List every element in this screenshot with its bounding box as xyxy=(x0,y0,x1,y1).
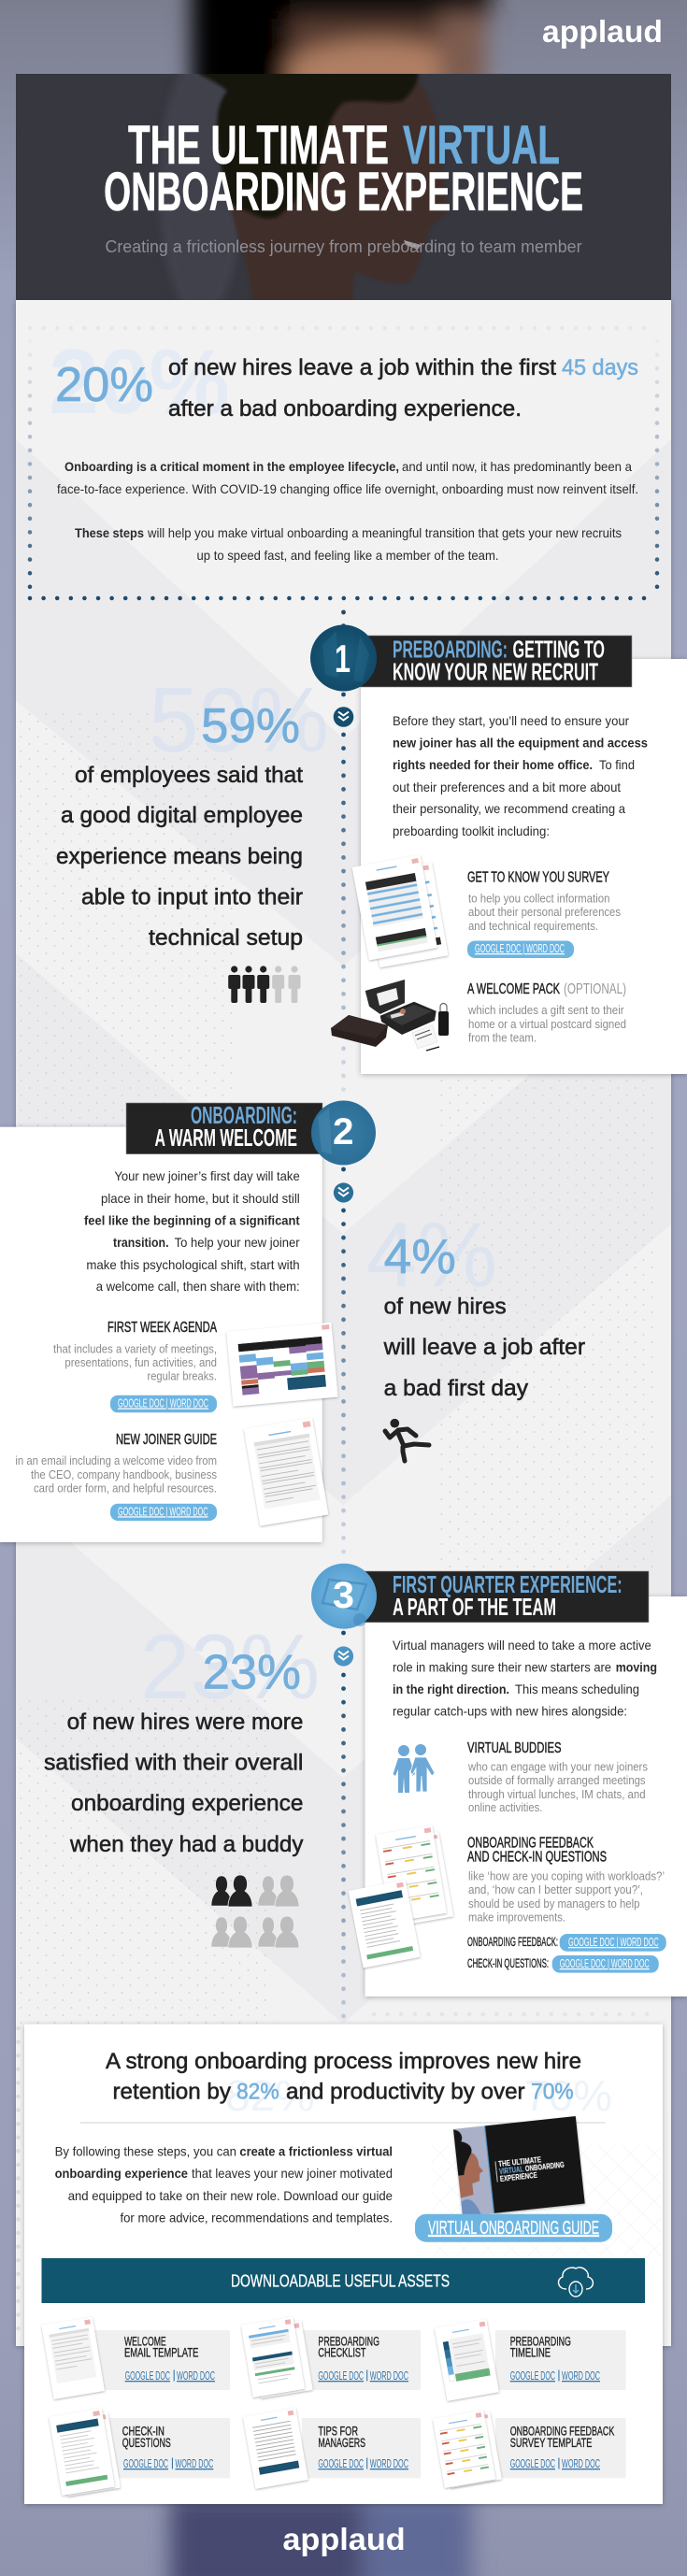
preboarding text: preboarding toolkit including: xyxy=(393,823,550,838)
conclusion text: and equipped to take on their new role. Download our guide xyxy=(68,2188,393,2203)
asset: tips for managers: GOOGLE DOC xyxy=(318,2456,364,2470)
onboarding text: place in their home, but it should still xyxy=(101,1191,300,1206)
conclusion heading: A strong onboarding process improves new hire xyxy=(106,2049,581,2074)
step 2 circle: 2 xyxy=(333,1111,353,1152)
intro stat: after a bad onboarding experience. xyxy=(168,396,522,422)
asset: tips for managers: WORD DOC xyxy=(370,2456,408,2470)
stat: 4% xyxy=(366,1204,585,1401)
asset: check-in questions: WORD DOC xyxy=(176,2456,213,2470)
main panel xyxy=(16,300,671,2346)
feedback item: ONBOARDING FEEDBACK xyxy=(467,1836,594,1852)
feedback item: CHECK-IN QUESTIONS: xyxy=(467,1956,549,1970)
conclusion text: create a frictionless virtual xyxy=(239,2144,393,2159)
stat: 23%: of new hires were more xyxy=(67,1710,303,1735)
step 1 heading bar: PREBOARDING: xyxy=(393,636,508,664)
stat: 23%: 23% xyxy=(140,1615,320,1718)
survey item: to help you collect information xyxy=(468,893,610,906)
panel: conclusion card xyxy=(24,2025,663,2504)
first quarter text: role in making sure their new starters are xyxy=(393,1660,611,1675)
virtual buddies item: through virtual lunches, IM chats, and xyxy=(468,1788,646,1801)
asset: check-in questions: | xyxy=(171,2455,174,2469)
asset: tips for managers: | xyxy=(365,2455,368,2469)
conclusion heading xyxy=(106,2049,612,2120)
asset: preboarding checklist: PREBOARDING xyxy=(318,2334,379,2348)
step 3 heading bar: A PART OF THE TEAM xyxy=(393,1593,556,1621)
onboarding text: feel like the beginning of a significant xyxy=(84,1213,300,1228)
stat: 4%: of new hires xyxy=(384,1295,507,1320)
survey item: GOOGLE DOC | WORD DOC xyxy=(475,942,565,955)
preboarding text: new joiner has all the equipment and access xyxy=(393,735,648,750)
agenda item: regular breaks. xyxy=(148,1370,217,1383)
asset: preboarding checklist: | xyxy=(365,2368,368,2382)
asset: onboarding feedback survey template: WORD DOC xyxy=(562,2456,600,2470)
asset: tips for managers: MANAGERS xyxy=(318,2436,365,2450)
survey item xyxy=(467,870,621,958)
chevron marker 1 xyxy=(334,707,353,727)
onboarding text: To help your new joiner xyxy=(175,1235,300,1250)
welcome pack item: A WELCOME PACK xyxy=(467,981,560,997)
step 1 circle xyxy=(310,624,377,692)
stat: 59%: 59% xyxy=(201,699,300,753)
asset: check-in questions: GOOGLE DOC xyxy=(123,2456,168,2470)
asset: tips for managers: TIPS FOR xyxy=(318,2425,358,2439)
agenda item: presentations, fun activities, and xyxy=(64,1356,217,1369)
survey item: GET TO KNOW YOU SURVEY xyxy=(467,870,609,886)
guide item: the CEO, company handbook, business xyxy=(31,1468,217,1481)
welcome pack item: from the team. xyxy=(468,1032,537,1045)
stat: 4%: 4% xyxy=(366,1204,497,1307)
stat: 59%: a good digital employee xyxy=(61,803,303,828)
feedback item: should be used by managers to help xyxy=(468,1897,640,1911)
asset: welcome email template: GOOGLE DOC xyxy=(125,2368,170,2383)
first quarter text xyxy=(393,1638,657,1719)
asset: preboarding checklist: CHECKLIST xyxy=(318,2346,366,2360)
conclusion text: for more advice, recommendations and templates. xyxy=(120,2211,393,2225)
document: joiner guide xyxy=(244,1418,328,1526)
feedback item: AND CHECK-IN QUESTIONS xyxy=(467,1850,607,1866)
step 1 circle: 1 xyxy=(335,637,351,680)
icon: runner xyxy=(385,1419,429,1461)
step 3 heading bar xyxy=(360,1570,649,1623)
welcome pack item: (OPTIONAL) xyxy=(564,981,626,997)
welcome pack item: which includes a gift sent to their xyxy=(467,1004,624,1017)
asset: preboarding checklist: WORD DOC xyxy=(370,2368,408,2383)
subtitle: Creating a frictionless journey from preboarding to team member xyxy=(105,237,582,256)
guide cover: VIRTUAL xyxy=(499,2164,523,2176)
asset: tips for managers xyxy=(243,2408,421,2489)
guide cover: THE ULTIMATE xyxy=(498,2154,542,2168)
asset: preboarding checklist: GOOGLE DOC xyxy=(318,2368,364,2383)
virtual buddies item: outside of formally arranged meetings xyxy=(468,1774,646,1787)
asset: preboarding checklist xyxy=(241,2317,421,2398)
onboarding text: Your new joiner’s first day will take xyxy=(114,1168,300,1183)
feedback item: and, ‘how can I better support you?’, xyxy=(468,1883,643,1896)
agenda item: FIRST WEEK AGENDA xyxy=(107,1320,217,1336)
guide item: in an email including a welcome video from xyxy=(15,1454,217,1467)
agenda item: that includes a variety of meetings, xyxy=(53,1343,217,1356)
step 1 heading bar: GETTING TO xyxy=(512,636,605,664)
guide item: NEW JOINER GUIDE xyxy=(116,1432,217,1448)
virtual buddies item: online activities. xyxy=(468,1801,542,1814)
center timeline dots xyxy=(341,612,346,2020)
onboarding text xyxy=(84,1168,300,1294)
asset: preboarding timeline: PREBOARDING xyxy=(510,2334,571,2348)
asset: welcome email template: WELCOME xyxy=(124,2334,166,2348)
stat: 23%: 23% xyxy=(203,1646,301,1700)
icon: buddy pairs xyxy=(211,1875,299,1948)
asset: preboarding timeline xyxy=(435,2319,626,2401)
guide item xyxy=(15,1432,217,1521)
conclusion text: that leaves your new joiner motivated xyxy=(192,2166,393,2181)
assets banner xyxy=(41,2258,645,2303)
panel: first quarter card xyxy=(365,1596,687,1996)
stat: 4%: will leave a job after xyxy=(383,1335,585,1360)
asset: welcome email template xyxy=(41,2317,230,2399)
stat: 23%: onboarding experience xyxy=(71,1791,303,1816)
feedback item: make improvements. xyxy=(468,1911,565,1925)
image: welcome pack xyxy=(331,980,449,1051)
asset: preboarding timeline: | xyxy=(557,2368,561,2382)
asset: check-in questions: QUESTIONS xyxy=(122,2436,171,2450)
asset: onboarding feedback survey template: ONBOARDING FEEDBACK xyxy=(510,2425,614,2439)
preboarding text: rights needed for their home office. xyxy=(393,757,593,772)
asset: welcome email template: WORD DOC xyxy=(177,2368,215,2383)
applaud logo bottom: applaud xyxy=(282,2522,406,2556)
icon: people 3 of 5 xyxy=(228,966,301,1003)
intro stat: of new hires leave a job within the first xyxy=(168,355,556,380)
step 3 circle: 3 xyxy=(333,1575,354,1616)
step 3 circle xyxy=(311,1564,377,1629)
guide item: GOOGLE DOC | WORD DOC xyxy=(118,1505,208,1518)
intro stat: 45 days xyxy=(562,355,638,380)
stat: 23% xyxy=(44,1615,320,1857)
intro text: face-to-face experience. With COVID-19 changing office life overnight, onboarding must now reinvent itself. xyxy=(57,481,638,496)
asset: preboarding timeline: TIMELINE xyxy=(510,2346,551,2360)
applaud logo top: applaud xyxy=(542,14,663,49)
document: survey xyxy=(352,855,448,967)
intro stat: 20% xyxy=(55,358,153,412)
intro text: Onboarding is a critical moment in the employee lifecycle, xyxy=(64,459,399,474)
stat: 59%: 59% xyxy=(149,668,329,771)
blurred portrait backdrop top xyxy=(192,0,491,105)
preboarding text: Before they start, you’ll need to ensure your xyxy=(393,713,629,728)
panel: onboarding card xyxy=(0,1127,322,1542)
title: VIRTUAL xyxy=(403,115,560,176)
first quarter text: This means scheduling xyxy=(515,1682,639,1696)
chevron marker 3 xyxy=(334,1646,353,1667)
blurred backdrop bottom xyxy=(170,2496,472,2576)
first quarter text: regular catch-ups with new hires alongside: xyxy=(393,1704,627,1719)
survey item: about their personal preferences xyxy=(468,906,621,919)
conclusion heading: 70% xyxy=(531,2080,574,2105)
conclusion text xyxy=(55,2144,393,2225)
intro text: These steps xyxy=(75,525,144,540)
conclusion heading: 70% xyxy=(524,2071,612,2120)
welcome pack item xyxy=(467,981,626,1045)
step 2 heading bar: ONBOARDING: xyxy=(191,1101,297,1129)
step 2 circle xyxy=(311,1101,376,1165)
title xyxy=(104,115,583,222)
icon: cloud download xyxy=(558,2268,593,2297)
preboarding text xyxy=(393,713,648,838)
stat: 59%: technical setup xyxy=(149,925,303,951)
header banner with portrait xyxy=(16,74,671,300)
guide item: card order form, and helpful resources. xyxy=(34,1482,217,1496)
conclusion heading: 82% xyxy=(225,2071,315,2120)
virtual buddies item xyxy=(467,1740,648,1814)
assets banner: DOWNLOADABLE USEFUL ASSETS xyxy=(231,2272,450,2291)
intro text xyxy=(57,459,638,563)
intro stat: 20% xyxy=(49,330,230,433)
guide cover xyxy=(451,2116,585,2217)
virtual buddies item: VIRTUAL BUDDIES xyxy=(467,1740,562,1756)
onboarding text: a welcome call, then share with them: xyxy=(96,1279,300,1294)
guide cover: ONBOARDING xyxy=(524,2160,565,2173)
title: THE ULTIMATE xyxy=(128,115,389,176)
agenda item: GOOGLE DOC | WORD DOC xyxy=(118,1396,208,1410)
welcome pack item: home or a virtual postcard signed xyxy=(468,1018,626,1031)
asset: onboarding feedback survey template: SURVEY TEMPLATE xyxy=(510,2436,592,2450)
onboarding text: transition. xyxy=(113,1235,168,1250)
stat: 4%: 4% xyxy=(384,1230,456,1284)
conclusion heading: and productivity by over xyxy=(286,2080,525,2105)
asset: check-in questions: CHECK-IN xyxy=(122,2425,165,2439)
step 2 heading bar xyxy=(126,1101,322,1154)
feedback item xyxy=(467,1836,666,1973)
dotted frame xyxy=(19,328,657,2337)
chevron marker 2 xyxy=(334,1182,353,1203)
preboarding text: out their preferences and a bit more about xyxy=(393,780,621,794)
stat: 23%: when they had a buddy xyxy=(69,1832,303,1857)
intro text: and until now, it has predominantly been a xyxy=(402,459,632,474)
asset: preboarding timeline: WORD DOC xyxy=(562,2368,600,2383)
asset: check-in questions xyxy=(49,2409,230,2497)
stat: 23%: satisfied with their overall xyxy=(44,1751,303,1776)
first quarter text: moving xyxy=(616,1660,657,1675)
feedback item: like ‘how are you coping with workloads?’ xyxy=(468,1870,665,1883)
first quarter text: in the right direction. xyxy=(393,1682,509,1696)
stat: 59% xyxy=(56,668,329,951)
guide button xyxy=(415,2214,612,2242)
stat: 59%: of employees said that xyxy=(75,763,303,788)
conclusion text: By following these steps, you can xyxy=(55,2144,236,2159)
asset: preboarding timeline: GOOGLE DOC xyxy=(510,2368,555,2383)
asset: welcome email template: | xyxy=(172,2368,176,2382)
intro text: up to speed fast, and feeling like a member of the team. xyxy=(196,548,499,563)
panel: preboarding card xyxy=(361,659,687,1074)
asset: welcome email template: EMAIL TEMPLATE xyxy=(124,2346,198,2360)
asset: onboarding feedback survey template: | xyxy=(557,2455,561,2469)
preboarding text: their personality, we recommend creating a xyxy=(393,801,625,816)
documents: feedback and check-in xyxy=(349,1825,453,1968)
preboarding text: To find xyxy=(599,757,635,772)
asset: onboarding feedback survey template: GOOGLE DOC xyxy=(510,2456,555,2470)
conclusion heading: retention by xyxy=(112,2080,231,2105)
conclusion heading: 82% xyxy=(236,2080,279,2105)
survey item: and technical requirements. xyxy=(468,920,598,933)
agenda item xyxy=(53,1320,217,1412)
feedback item: ONBOARDING FEEDBACK: xyxy=(467,1935,558,1949)
stat: 4%: a bad first day xyxy=(384,1376,528,1401)
virtual buddies item: who can engage with your new joiners xyxy=(467,1761,648,1774)
intro stat xyxy=(49,330,638,433)
intro text: will help you make virtual onboarding a meaningful transition that gets your new recruits xyxy=(147,525,622,540)
guide cover: EXPERIENCE xyxy=(499,2170,537,2183)
rule xyxy=(80,2122,606,2124)
diamond pattern xyxy=(432,2145,662,2257)
stat: 59%: able to input into their xyxy=(81,884,303,910)
step 2 heading bar: A WARM WELCOME xyxy=(155,1123,297,1152)
stat: 59%: experience means being xyxy=(56,844,303,869)
onboarding text: make this psychological shift, start with xyxy=(86,1257,300,1272)
step 1 heading bar xyxy=(360,636,632,687)
document: agenda xyxy=(226,1323,338,1407)
asset: onboarding feedback survey template xyxy=(433,2410,626,2488)
first quarter text: Virtual managers will need to take a more active xyxy=(393,1638,651,1653)
icon: virtual buddies xyxy=(393,1744,435,1793)
conclusion text: onboarding experience xyxy=(55,2166,188,2181)
